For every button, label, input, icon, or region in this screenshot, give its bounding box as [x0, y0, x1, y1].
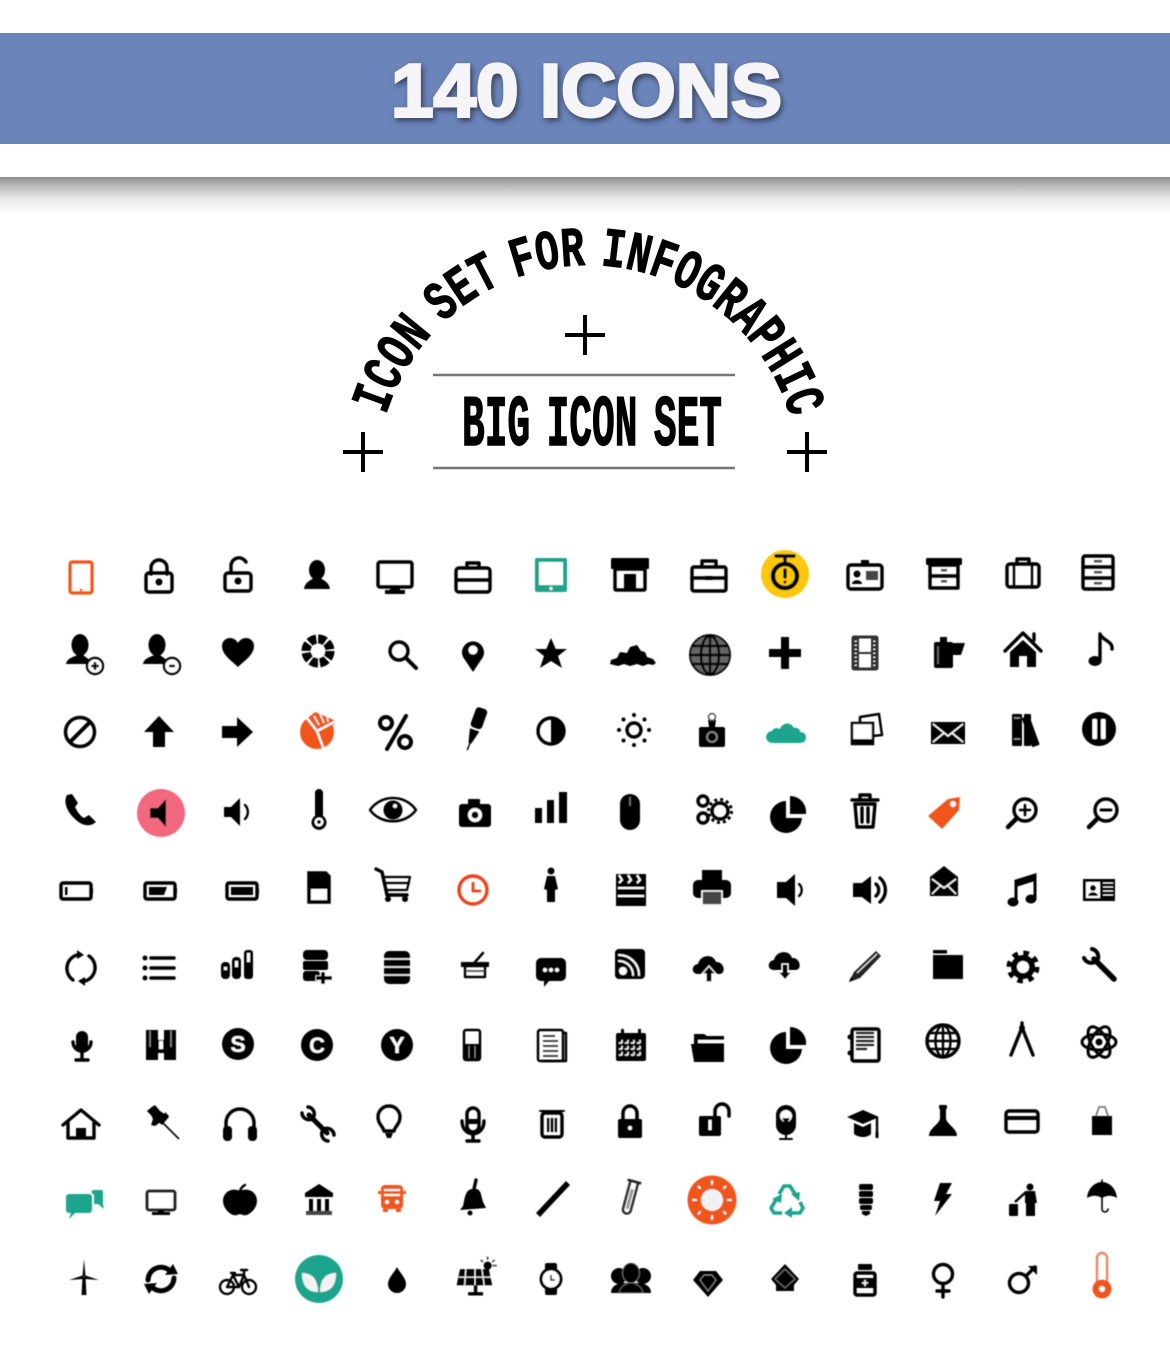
icon: monitor	[378, 562, 412, 594]
icon: heart	[222, 638, 254, 667]
icon: mobile phone	[464, 1030, 480, 1060]
icon: trash can	[852, 795, 878, 827]
icon: pause	[1082, 712, 1116, 746]
icon: star	[535, 638, 567, 668]
icon: stopwatch on yellow circle	[761, 550, 809, 598]
icon: computer mouse	[620, 794, 640, 830]
icon: list	[142, 956, 174, 980]
icon: grey globe	[690, 635, 730, 675]
icon: contact card	[1083, 879, 1115, 901]
icon: settings gear	[1010, 954, 1036, 980]
icon: filing cabinet	[1083, 556, 1113, 589]
subheading: BIG ICON SET	[462, 385, 722, 467]
icon: yen coin	[381, 1029, 413, 1061]
icon: pen	[462, 706, 488, 752]
icon: notebook	[848, 1029, 879, 1061]
icon: house	[1005, 633, 1041, 667]
icon: speaker medium	[777, 874, 802, 906]
icon: solar panel	[457, 1256, 497, 1296]
icon: ruler	[536, 1181, 570, 1217]
icon: rounded bars	[221, 950, 253, 979]
icon: pie chart	[770, 796, 806, 833]
title: 140 ICONS	[391, 48, 782, 132]
icon: cent coin: C	[309, 1033, 325, 1058]
icon: home outline	[63, 1110, 99, 1139]
icon: storm cloud	[610, 645, 656, 666]
icon: prohibited	[66, 718, 94, 746]
icon grid	[61, 550, 1117, 1303]
icon: male symbol	[1010, 1266, 1037, 1292]
icon: cloud download	[769, 952, 800, 980]
icon: medicine bottle	[855, 1264, 875, 1295]
icon: open lock outline	[225, 558, 251, 591]
icon: energy saving bulb	[859, 1184, 873, 1216]
icon: clapperboard	[616, 874, 646, 906]
icon: suitcase	[1007, 559, 1039, 587]
icon: camera	[459, 799, 491, 827]
icon: aperture	[306, 639, 330, 663]
icon: lightning bolt	[934, 1183, 952, 1216]
icon: music notes	[1008, 875, 1036, 906]
icon: zoom in	[1008, 799, 1036, 827]
icon: speaker on pink circle	[137, 789, 185, 837]
icon: music note	[1088, 634, 1112, 666]
icon: female symbol	[934, 1264, 952, 1297]
badge: icon set heading	[343, 228, 827, 472]
heading rules	[433, 375, 735, 468]
icon: flask	[929, 1105, 957, 1136]
icon: battery low	[61, 883, 93, 899]
icon: lock outline	[146, 560, 172, 592]
icon: zoom out	[1089, 799, 1117, 827]
icon: apple	[223, 1185, 257, 1215]
icon: toolbox	[692, 561, 726, 591]
icon: credit card	[1006, 1111, 1038, 1132]
icon: folder	[933, 950, 963, 979]
icon: printer	[693, 870, 731, 905]
icon: recycle symbol	[771, 1186, 803, 1218]
icon: cloud upload	[693, 956, 724, 982]
icon: umbrella	[1087, 1180, 1117, 1212]
icon: cent coin	[301, 1029, 333, 1061]
icon: wrench	[1084, 949, 1114, 979]
icon: briefcase	[456, 563, 490, 592]
icon: refresh arrows	[67, 950, 95, 986]
icon: spanner	[302, 1107, 334, 1141]
icon: atom	[1082, 1023, 1116, 1061]
icon: wrist watch	[541, 1263, 561, 1295]
arched heading: ICON SET FOR INFOGRAPHIC	[351, 228, 824, 414]
icon: desktop monitor	[147, 1191, 175, 1215]
icon: flash camera	[699, 714, 725, 747]
icon: add user	[66, 634, 103, 674]
icon: battery full	[227, 883, 259, 899]
icon: pie chart solid	[770, 1027, 806, 1064]
icon: pencil	[849, 951, 881, 982]
icon: open padlock	[699, 1104, 729, 1136]
icon: wind turbine	[69, 1259, 99, 1295]
icon: gears	[698, 796, 732, 823]
icon: memory card	[308, 872, 330, 903]
icon: teal cloud	[766, 724, 806, 743]
icon: orange price tag	[928, 797, 960, 829]
icon: open envelope	[930, 866, 958, 896]
shadow band under banner	[0, 177, 1170, 215]
icon: drawing compass	[1011, 1023, 1033, 1055]
icon: push pin	[147, 1105, 179, 1139]
icon: teal speech bubbles	[66, 1190, 104, 1219]
icon: right arrow	[222, 717, 253, 747]
icon: battery half	[145, 883, 177, 899]
icon: add database	[303, 950, 332, 984]
icon: database	[384, 951, 410, 984]
icon: thermometer	[312, 789, 326, 830]
icon: chat bubble	[536, 958, 566, 987]
icon: search	[390, 642, 416, 668]
icon: orange tablet	[70, 562, 92, 593]
icon: calendar	[616, 1029, 646, 1061]
header banner	[0, 33, 1170, 144]
icon: group of people	[611, 1263, 651, 1293]
icon: test tube	[619, 1180, 641, 1215]
icon: speaker low	[224, 798, 248, 826]
icon: diamond gem	[693, 1271, 723, 1297]
icon: user	[304, 560, 330, 589]
icon: bell	[460, 1180, 486, 1216]
icon: archive box	[926, 558, 962, 588]
icon: light bulb	[378, 1106, 400, 1138]
icon: sun on orange circle	[688, 1176, 736, 1224]
icon: document	[538, 1030, 566, 1061]
icon: store	[611, 558, 649, 590]
icon: phone handset	[65, 794, 96, 825]
icon: plus	[769, 637, 801, 669]
icon: up arrow	[144, 716, 174, 747]
icon: remove user	[143, 634, 180, 674]
icon: yen coin: Y	[389, 1032, 405, 1058]
icon: envelope	[931, 722, 965, 744]
icon: film strip	[853, 637, 877, 669]
icon: shopping bag	[1092, 1107, 1112, 1135]
icon: basket	[461, 953, 489, 977]
icon: shopping cart	[376, 869, 410, 902]
icon: studio microphone	[462, 1108, 484, 1141]
icon: standing person	[544, 868, 558, 902]
icon: water drop	[388, 1267, 406, 1293]
icon: padlock	[618, 1106, 642, 1138]
icon: binoculars	[146, 1030, 176, 1060]
icon: teal tablet	[535, 558, 567, 592]
icon: orange bus	[378, 1185, 406, 1212]
icon: film canister	[934, 637, 965, 668]
icon: bicycle	[220, 1270, 256, 1294]
icon: graduation cap	[847, 1110, 879, 1138]
icon: orange pie chart	[300, 712, 336, 750]
plus marks	[343, 315, 827, 472]
icon: dollar coin: S	[230, 1031, 246, 1057]
icon: percent	[380, 716, 411, 749]
icon: sync arrows	[144, 1264, 178, 1294]
icon: orange thermometer	[1092, 1253, 1112, 1298]
icon: books	[1012, 714, 1040, 747]
icon: world globe	[927, 1025, 959, 1057]
icon: id badge	[848, 560, 882, 589]
icon: speaker loud	[853, 876, 885, 904]
icon: map pin	[462, 641, 484, 672]
icon: person with bin	[1009, 1184, 1037, 1216]
icon: dollar coin	[222, 1028, 254, 1060]
icon: bar chart	[535, 792, 567, 823]
icon: half circle contrast	[538, 718, 564, 744]
icon: bank building	[305, 1184, 333, 1215]
icon: sun outline	[617, 713, 651, 747]
icon: stacked photos	[852, 714, 882, 744]
icon: orange clock	[459, 876, 487, 904]
icon: round microphone	[776, 1105, 796, 1139]
icon: headphones	[223, 1109, 257, 1141]
icon: microphone	[73, 1031, 91, 1060]
icon: rss feed	[615, 949, 645, 979]
icon: open folder	[691, 1034, 724, 1062]
icon: eye	[370, 798, 416, 821]
icon: waste bin	[540, 1111, 564, 1137]
icon: faceted gem	[771, 1264, 799, 1291]
icon: leaves on teal circle	[295, 1255, 343, 1303]
